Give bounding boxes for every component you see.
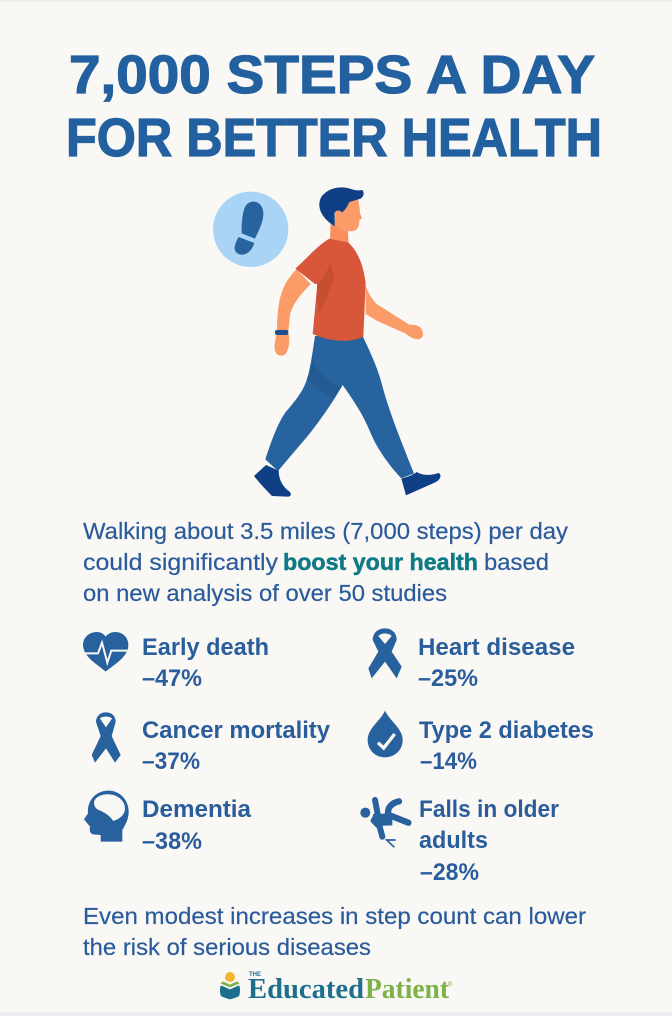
wristband (275, 330, 288, 335)
logo: The Educated Patient: ® (448, 981, 453, 988)
stat: dementia: Dementia (142, 796, 252, 823)
face (335, 197, 362, 231)
stat: early death (83, 632, 269, 692)
stat: falls in older adults: –28% (420, 859, 479, 886)
logo: The Educated Patient: Educated (248, 973, 364, 1005)
icon: ribbon (92, 712, 121, 763)
stat: heart disease: –25% (418, 665, 478, 692)
stat: cancer mortality (92, 712, 331, 775)
near arm (277, 269, 311, 332)
intro text: Walking about 3.5 miles (7,000 steps) per day (83, 518, 569, 544)
stat: type 2 diabetes: –14% (420, 748, 477, 775)
intro text: boost your health (283, 549, 478, 575)
shoes (254, 465, 291, 497)
stat: falls in older adults (360, 796, 559, 886)
t-shirt (295, 239, 366, 341)
icon: heart with pulse (83, 632, 128, 672)
closing text: Even modest increases in step count can lower (83, 903, 586, 929)
icon: falling person (360, 800, 408, 847)
trouser shadow (307, 357, 341, 398)
stat: falls in older adults: Falls in older (419, 796, 559, 823)
intro text: on new analysis of over 50 studies (83, 580, 447, 606)
icon: blood drop with check (368, 711, 403, 757)
hair (319, 187, 364, 226)
icon: footprint badge (213, 192, 288, 267)
stat: heart disease: Heart disease (418, 634, 575, 661)
illustration: walking man (254, 187, 441, 497)
stat: falls in older adults: adults (419, 827, 488, 854)
stat: cancer mortality: –37% (142, 748, 200, 775)
stat: type 2 diabetes: Type 2 diabetes (419, 717, 594, 744)
stat: type 2 diabetes (368, 711, 594, 775)
stat: dementia: –38% (142, 828, 202, 855)
intro text: could significantly (83, 549, 279, 575)
stat: dementia (84, 791, 252, 855)
icon: head with brain (84, 791, 129, 842)
stat: cancer mortality: Cancer mortality (142, 717, 331, 744)
intro text: based (484, 549, 549, 575)
title (66, 45, 602, 168)
stat: early death: Early death (142, 634, 269, 661)
hand (274, 334, 289, 356)
far arm (366, 286, 423, 339)
trousers (265, 336, 414, 478)
stat: early death: –47% (142, 665, 202, 692)
icon: ribbon (368, 628, 402, 678)
closing text (83, 903, 586, 960)
stat: heart disease (368, 628, 575, 692)
neck (330, 220, 349, 243)
intro text (83, 518, 569, 606)
title: FOR BETTER HEALTH (66, 108, 602, 168)
logo: The Educated Patient: Patient (365, 973, 449, 1005)
logo: The Educated Patient: THE (249, 972, 261, 978)
title: 7,000 STEPS A DAY (69, 45, 595, 105)
logo: The Educated Patient (220, 972, 453, 1005)
icon: book and sun (220, 972, 240, 999)
closing text: the risk of serious diseases (83, 934, 371, 960)
